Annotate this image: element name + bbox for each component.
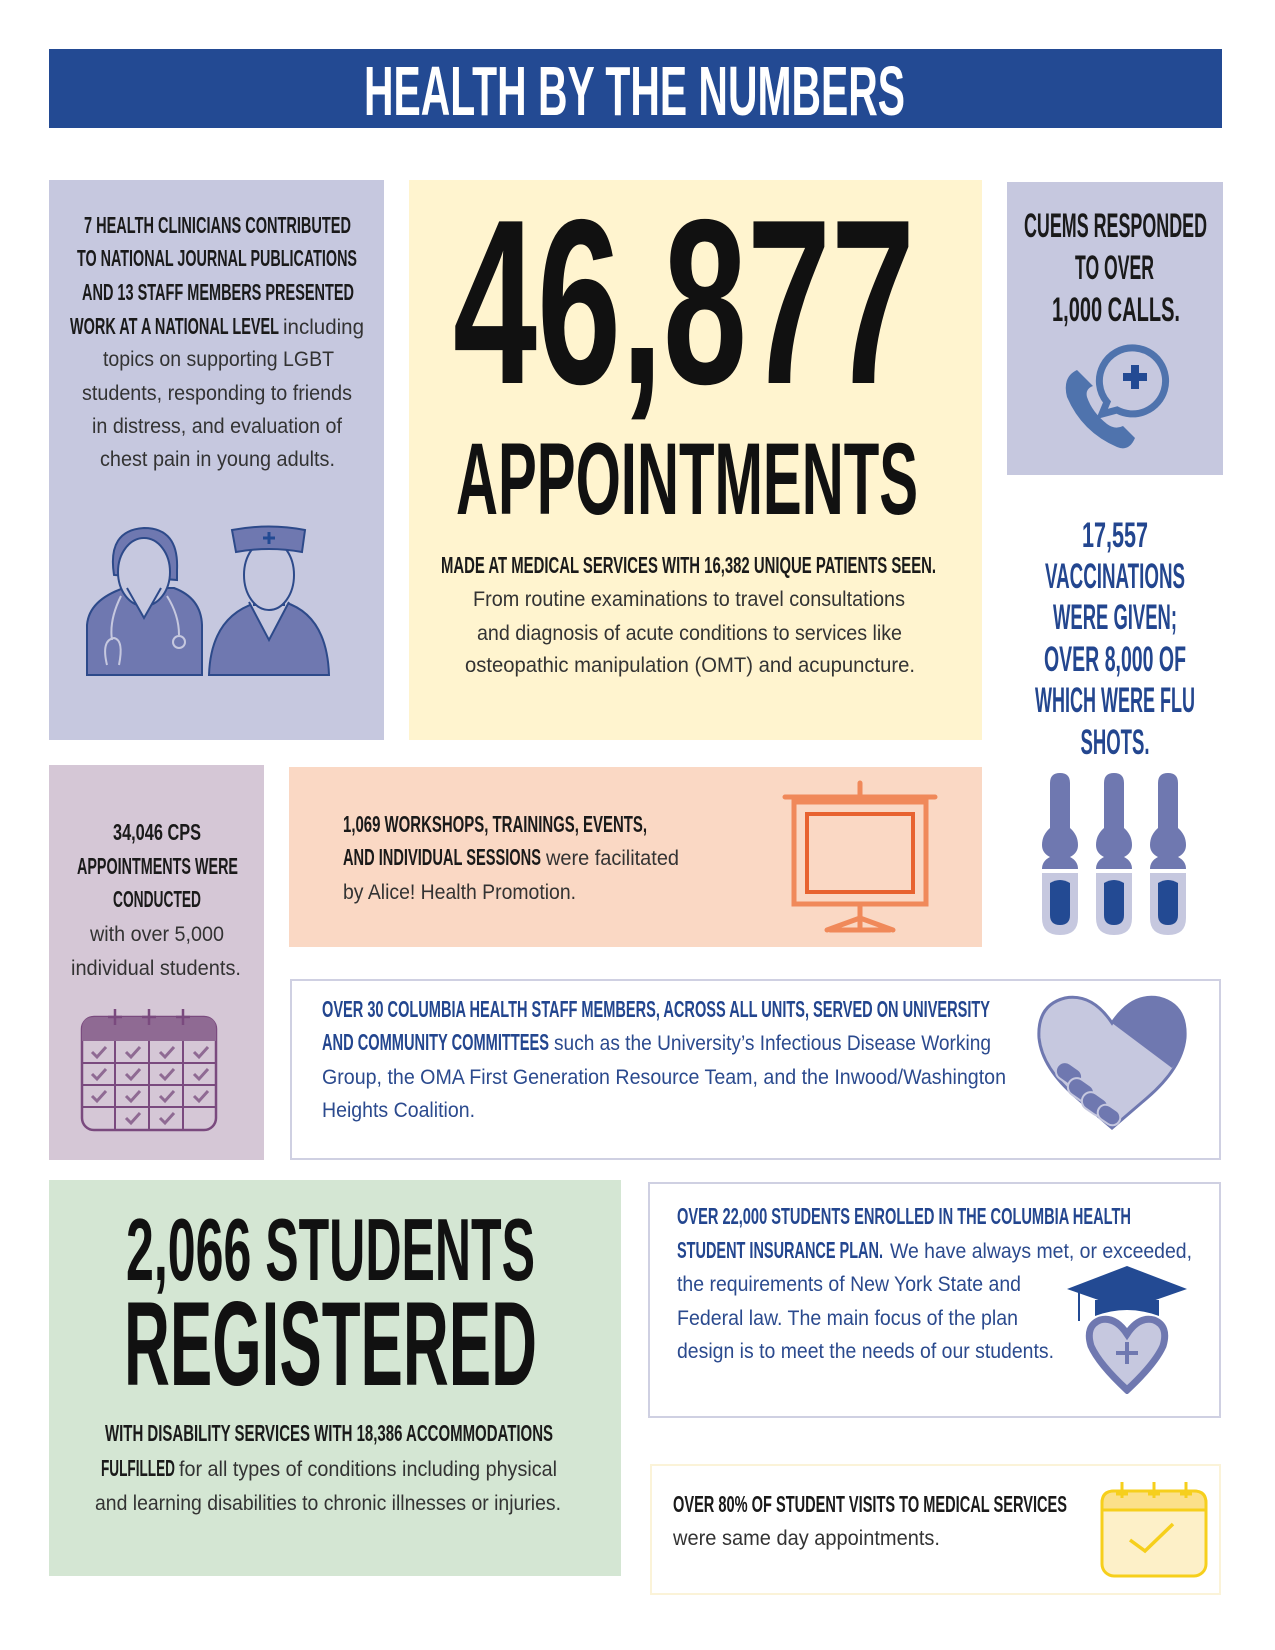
text: appointments description: From routine examinations to travel consultations — [473, 588, 905, 611]
label: appointments: APPOINTMENTS — [456, 422, 918, 536]
text: insurance: the requirements of New York State and — [677, 1273, 1021, 1296]
text: clinicians: students, responding to friends — [82, 382, 352, 405]
text: clinicians: chest pain in young adults. — [100, 448, 335, 471]
panel: committees — [290, 979, 1221, 1160]
icon: vials — [1042, 773, 1186, 935]
text: insurance: design is to meet the needs of our students. — [677, 1340, 1054, 1363]
text: clinicians: including — [283, 316, 364, 339]
text: insurance: We have always met, or exceeded, — [890, 1240, 1192, 1263]
text: insurance — [677, 1203, 1192, 1363]
icon: presentation easel — [782, 780, 938, 932]
text: clinicians: TO NATIONAL JOURNAL PUBLICATIONS — [77, 245, 357, 271]
text: clinicians: WORK AT A NATIONAL LEVEL — [70, 313, 279, 339]
text: accommodations: for all types of conditions including physical — [179, 1458, 557, 1481]
text: appointments description: and diagnosis of acute conditions to services like — [477, 622, 902, 645]
text: committees: Heights Coalition. — [322, 1099, 475, 1122]
text: accommodations: WITH DISABILITY SERVICES WITH 18,386 ACCOMMODATIONS — [105, 1420, 553, 1446]
heading: 2,066 students: 2,066 STUDENTS — [126, 1200, 535, 1299]
text: insurance: Federal law. The main focus of the plan — [677, 1307, 1018, 1330]
panel: same day visits — [650, 1464, 1221, 1595]
text: accommodations: FULFILLED — [101, 1455, 175, 1481]
text: committees: such as the University’s Infectious Disease Working — [554, 1032, 991, 1055]
text: workshops: 1,069 WORKSHOPS, TRAININGS, EVENTS, — [343, 811, 647, 837]
icon: yellow calendar check — [1100, 1482, 1208, 1578]
text: same day: were same day appointments. — [672, 1527, 940, 1550]
text: CUEMS — [1024, 207, 1207, 329]
text: CPS: APPOINTMENTS WERE — [77, 853, 238, 879]
text: vaccinations: SHOTS. — [1080, 723, 1150, 762]
text: workshops: AND INDIVIDUAL SESSIONS — [343, 844, 541, 870]
text: CPS: CONDUCTED — [113, 886, 201, 912]
text: vaccinations — [1035, 516, 1195, 762]
text: appointments description: MADE AT MEDICAL SERVICES WITH 16,382 UNIQUE PATIENTS SEEN. — [441, 552, 936, 578]
panel: CPS — [49, 765, 264, 1160]
icon: calendar with checks — [80, 1009, 218, 1132]
text: appointments description: osteopathic manipulation (OMT) and acupuncture. — [465, 654, 915, 677]
text: clinicians: topics on supporting LGBT — [103, 348, 334, 371]
text: insurance: STUDENT INSURANCE PLAN. — [677, 1237, 883, 1263]
text: workshops: by Alice! Health Promotion. — [343, 881, 576, 904]
text: same day — [672, 1491, 1067, 1550]
icon: doctor and nurse — [86, 526, 330, 676]
panel: disability services — [49, 1180, 621, 1576]
title banner — [49, 49, 1222, 128]
text: workshops: were facilitated — [545, 847, 679, 870]
text: committees — [322, 996, 1006, 1122]
text: clinicians — [70, 212, 364, 471]
panel: clinicians — [49, 180, 384, 740]
text: appointments description — [441, 552, 936, 677]
panel: appointments — [409, 180, 982, 740]
text: clinicians: AND 13 STAFF MEMBERS PRESENTED — [82, 279, 354, 305]
big number: 46,877: 46,877 — [453, 170, 915, 433]
text: committees: Group, the OMA First Generation Resource Team, and the Inwood/Washington — [322, 1066, 1006, 1089]
panel: insurance — [648, 1182, 1221, 1418]
text: CPS — [71, 819, 241, 980]
text: accommodations — [95, 1420, 561, 1515]
panel: workshops — [289, 767, 982, 947]
icon: heart handshake — [1037, 996, 1187, 1130]
text: accommodations: and learning disabilities to chronic illnesses or injuries. — [95, 1492, 561, 1515]
panel: CUEMS — [1007, 182, 1223, 475]
text: CPS: individual students. — [71, 957, 241, 980]
text: vaccinations: 17,557 — [1082, 516, 1148, 555]
text: CPS: 34,046 CPS — [113, 819, 201, 845]
text: committees: AND COMMUNITY COMMITTEES — [322, 1029, 549, 1055]
text: CPS: with over 5,000 — [89, 923, 224, 946]
text: clinicians: 7 HEALTH CLINICIANS CONTRIBUTED — [84, 212, 351, 238]
text: CUEMS: 1,000 CALLS. — [1052, 291, 1180, 329]
text: workshops — [343, 811, 679, 904]
text: clinicians: in distress, and evaluation of — [92, 415, 342, 438]
text: CUEMS: TO OVER — [1075, 249, 1154, 287]
title: HEALTH BY THE NUMBERS — [364, 52, 905, 130]
heading: registered: REGISTERED — [124, 1277, 537, 1411]
icon: phone with medical bubble — [1066, 344, 1170, 448]
icon: grad cap with heart — [1067, 1266, 1187, 1394]
